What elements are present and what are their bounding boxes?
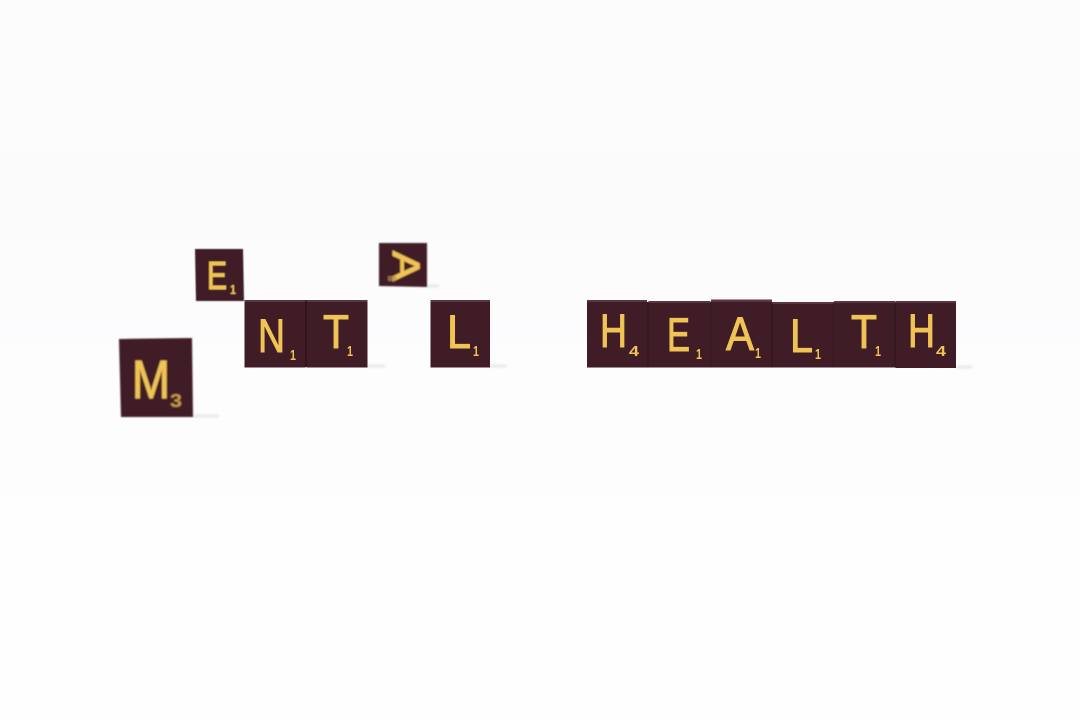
tile: M: M	[132, 350, 170, 410]
tiles: N T: 1	[290, 347, 296, 364]
tile: M	[119, 338, 193, 417]
tiles: N T: T	[323, 305, 349, 358]
word: HEALTH: 4	[629, 343, 640, 360]
tile shadows	[193, 285, 972, 417]
word: HEALTH: 4	[936, 343, 947, 360]
word: HEALTH: H	[908, 304, 935, 357]
word: HEALTH: L	[790, 309, 813, 362]
tile: A (tilted): A	[384, 251, 426, 282]
tiles: N T: N	[258, 309, 285, 362]
word: HEALTH: T	[851, 305, 877, 358]
tile: A (tilted)	[379, 243, 427, 287]
tiles: N T: 1	[347, 343, 353, 360]
tile: L: 1	[473, 343, 479, 360]
word: HEALTH: 1	[696, 346, 702, 363]
word: HEALTH: H	[600, 304, 627, 357]
word: HEALTH	[587, 300, 956, 368]
tiles: N T	[244, 300, 368, 368]
word: HEALTH: 1	[815, 346, 821, 363]
tile: L	[430, 300, 490, 368]
word: HEALTH: E	[667, 308, 690, 361]
tile: E: E	[207, 255, 227, 298]
tile: L: L	[447, 305, 471, 358]
tile: E: 1	[230, 282, 236, 297]
word: HEALTH: 1	[755, 345, 761, 362]
word: HEALTH: 1	[875, 343, 881, 360]
tile: E	[195, 249, 244, 301]
word: HEALTH: A	[726, 307, 755, 360]
tile: M: 3	[170, 391, 182, 411]
